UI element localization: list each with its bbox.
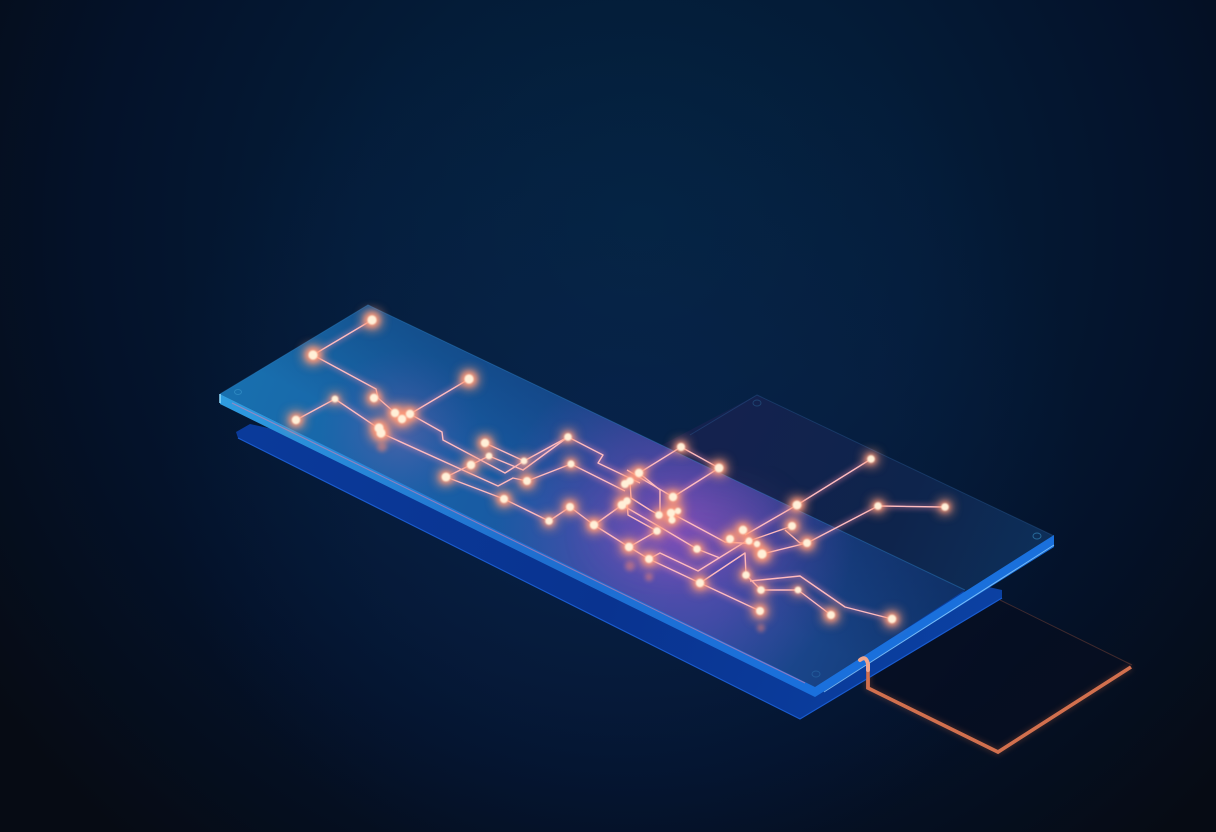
node cores	[292, 315, 949, 623]
node halos	[290, 313, 950, 625]
panel: orange outlined flat tile	[868, 600, 1132, 753]
panel: dark rear glass section	[660, 395, 1054, 592]
trace glow	[296, 320, 945, 619]
circuit traces and glowing nodes	[290, 313, 950, 632]
panel: main glass plate	[220, 305, 965, 688]
purple haze around circuit	[600, 490, 780, 570]
orange connector where the wire meets the glass edge	[860, 658, 868, 689]
icon: corner screw holes	[234, 390, 1041, 677]
lower blue plate	[236, 424, 1002, 719]
traces	[296, 320, 945, 619]
node reflections on glass	[377, 442, 765, 632]
glass plate thick front edge	[220, 394, 1054, 697]
